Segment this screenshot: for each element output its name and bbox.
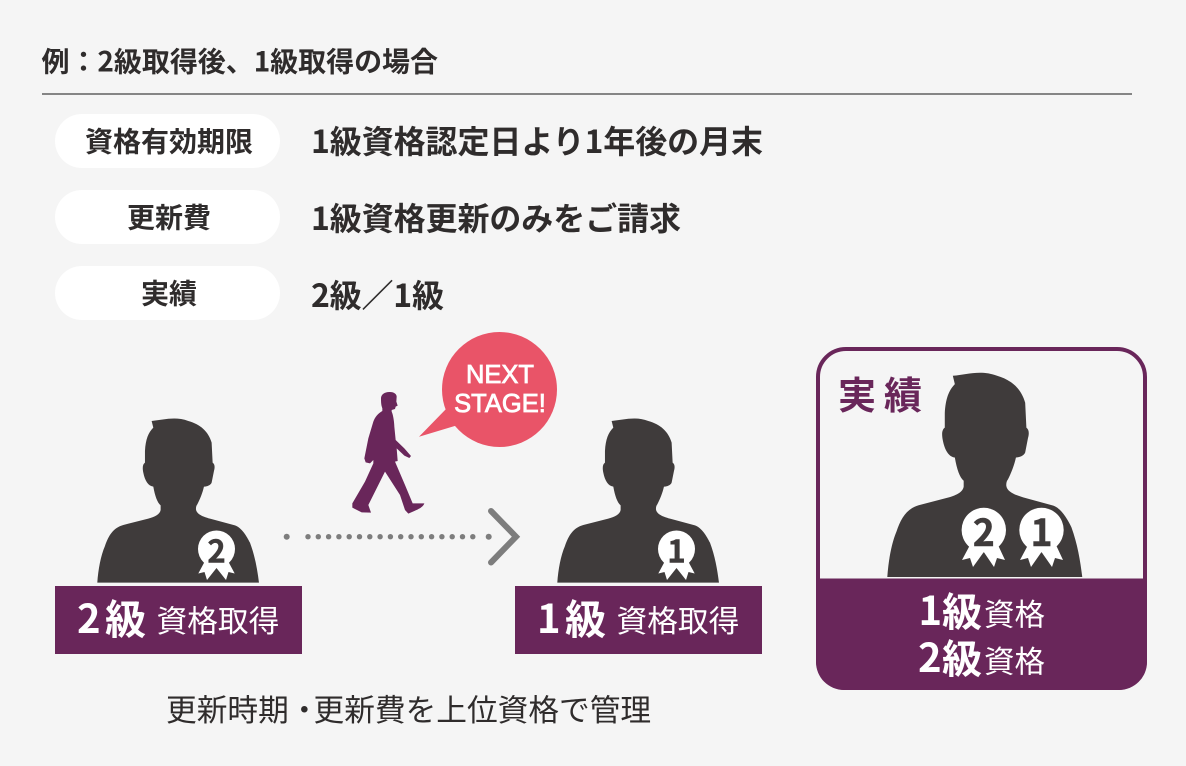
panel text: grade 2 [918, 626, 1045, 685]
label: grade 2 acquired: 級 [105, 586, 146, 646]
label: grade 2 acquired: 資格取得 [156, 596, 279, 641]
walking person [352, 392, 424, 514]
person: grade 1 holder [557, 419, 719, 583]
person: grade 2 holder [97, 419, 259, 583]
panel footer [816, 578, 1147, 690]
label: grade 1 acquired: 1 [537, 587, 561, 645]
icon: medal 2: 2 [207, 526, 226, 572]
row: renewal fee [55, 190, 681, 244]
icon: medal 2 large [962, 503, 1006, 567]
speech bubble: next stage: STAGE! [454, 390, 546, 418]
panel text: grade 2: 資格 [984, 638, 1045, 682]
icon: medal 2 [198, 526, 235, 580]
panel: record [816, 349, 1147, 690]
panel text: grade 1: 級 [942, 580, 982, 638]
pill: validity label: 資格有効期限 [85, 120, 253, 160]
panel text: grade 1 [918, 579, 1045, 638]
speech bubble: next stage: NEXT [466, 361, 534, 389]
icon: medal 1 large [1019, 503, 1064, 567]
speech bubble: next stage [419, 332, 557, 447]
icon: medal 1 [658, 526, 695, 580]
icon: medal 1: 1 [667, 526, 686, 572]
label: grade 1 acquired: 級 [565, 586, 606, 646]
label: grade 1 acquired: 資格取得 [616, 596, 739, 641]
record text: 2級／1級 [311, 271, 444, 317]
panel text: grade 1: 資格 [984, 590, 1045, 634]
panel heading: 実績 [838, 365, 922, 420]
caption: ・ [289, 685, 320, 730]
row: record [55, 266, 444, 320]
label: grade 2 acquired: 2 [77, 587, 101, 645]
panel text: grade 2: 級 [942, 627, 982, 685]
arrow: dotted progress [284, 511, 516, 562]
pill: record label [55, 266, 280, 320]
pill: renewal fee label: 更新費 [127, 196, 211, 236]
pill: validity label [55, 114, 280, 168]
caption: 更新時期 [166, 685, 289, 730]
validity text: 1級資格認定日より1年後の月末 [311, 117, 763, 163]
icon: medal 2 large: 2 [973, 503, 995, 557]
person: both grades holder [887, 373, 1082, 577]
panel text: grade 2: 2 [918, 626, 942, 684]
label: grade 1 acquired [515, 586, 762, 654]
row: validity period [55, 114, 763, 168]
renewal fee text: 1級資格更新のみをご請求 [311, 194, 681, 240]
label: grade 2 acquired [55, 586, 302, 654]
pill: record label: 実績 [141, 272, 197, 312]
icon: medal 1 large: 1 [1031, 503, 1052, 557]
panel text: grade 1: 1 [918, 579, 942, 637]
title: 例：2級取得後、1級取得の場合 [42, 40, 438, 80]
pill: renewal fee label [55, 190, 280, 244]
caption: 更新費を上位資格で管理 [314, 685, 651, 730]
